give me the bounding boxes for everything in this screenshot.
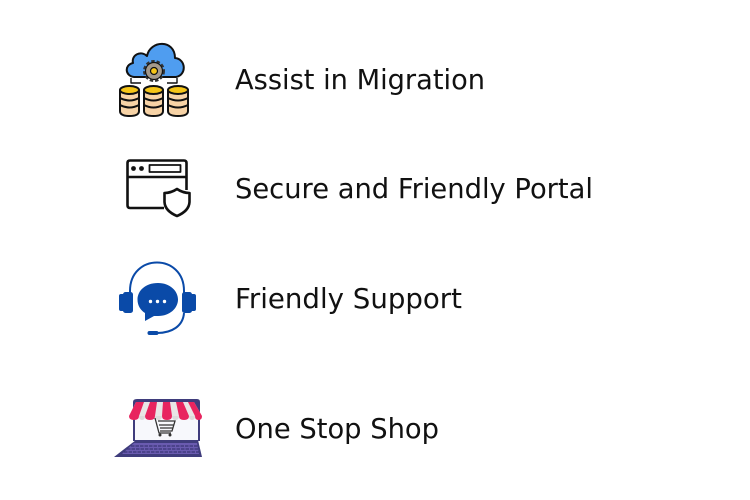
icon: browser window with shield <box>128 160 190 216</box>
heading: One Stop Shop: One Stop Shop <box>235 413 439 445</box>
icon: laptop storefront with awning and cart <box>114 399 202 457</box>
heading: Secure and Friendly Portal: Secure and Friendly Portal <box>235 173 593 205</box>
icon: support headset with chat bubble <box>119 262 196 335</box>
heading: Assist in Migration: Assist in Migration <box>235 64 485 96</box>
heading: Friendly Support: Friendly Support <box>235 283 462 315</box>
icon: cloud migration with databases <box>120 44 188 116</box>
